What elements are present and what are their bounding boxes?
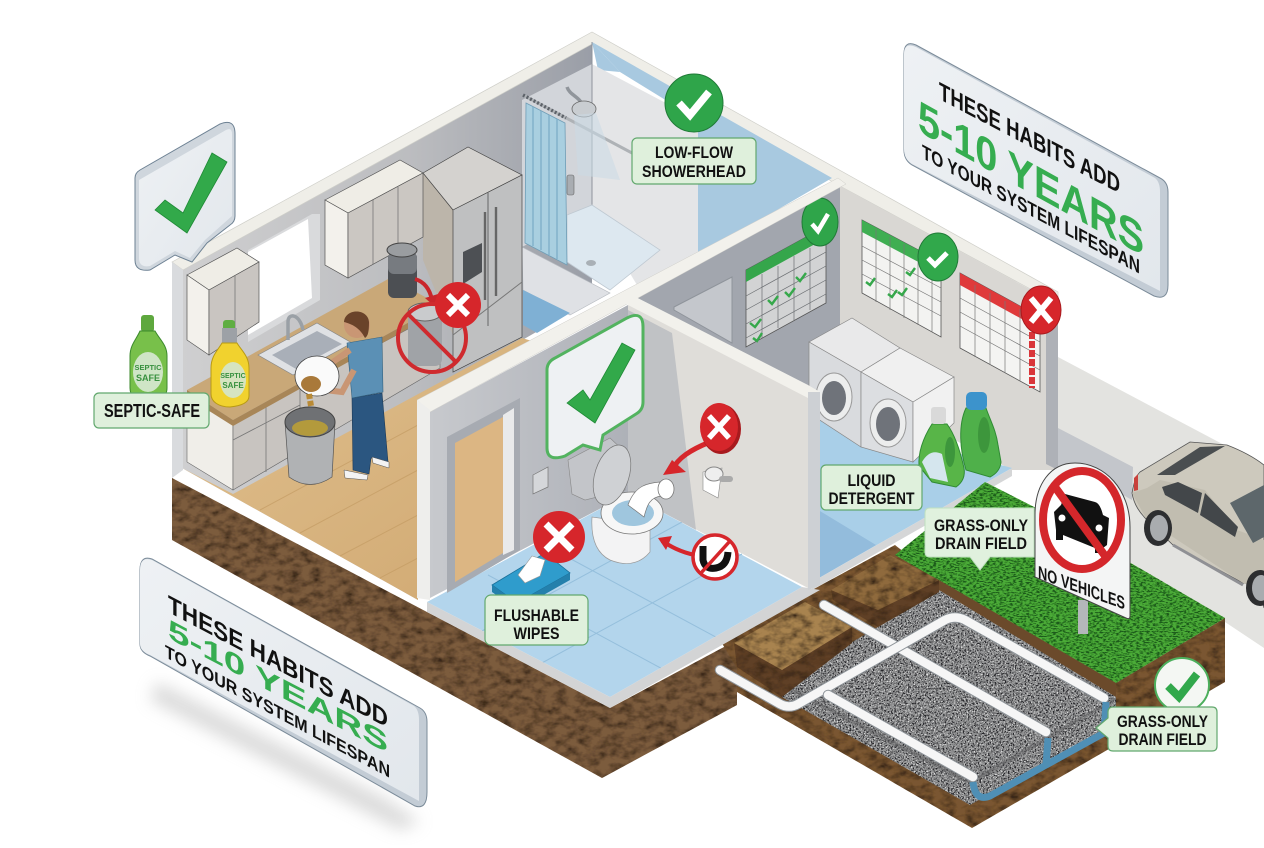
label: low-flow showerhead <box>632 138 756 184</box>
banner: lower left lifespan: THESE HABITS ADD <box>168 590 388 734</box>
washer and dryer <box>809 318 954 462</box>
fridge <box>423 147 522 372</box>
label: grass-only drain field (bottom) with check: GRASS-ONLY <box>1117 713 1208 731</box>
label: grass-only drain field (top): GRASS-ONLY <box>934 516 1029 535</box>
label: flushable wipes: FLUSHABLE <box>494 606 579 625</box>
banner: upper right lifespan: 5-10 YEARS <box>918 91 1144 267</box>
icon: liquid detergent bottles <box>919 392 1001 487</box>
laundry floor <box>810 413 1012 590</box>
bathroom partition wall front <box>417 178 846 600</box>
icon: wall toilet paper holder <box>703 467 733 498</box>
upper cabinet right <box>325 160 423 278</box>
check badge: low-flow showerhead <box>665 74 723 132</box>
person scraping plate <box>320 312 389 480</box>
callout: bathroom green check <box>547 315 643 458</box>
banner: lower left lifespan <box>140 558 427 807</box>
icon: low-flow showerhead <box>567 87 620 195</box>
kitchen back wall <box>172 32 1058 600</box>
soil block right <box>831 555 939 627</box>
toilet <box>568 438 663 564</box>
banner: lower left lifespan: TO YOUR SYSTEM LIFESPAN <box>165 642 390 783</box>
icon: crossed-out disposal <box>398 279 481 372</box>
underground distribution pipe <box>973 702 1106 797</box>
icon: plate of food scraps <box>295 356 339 418</box>
bottle: yellow dish soap <box>211 320 249 407</box>
shower room <box>522 42 832 290</box>
label: flushable wipes: WIPES <box>514 624 560 643</box>
bottle: green septic-safe dish soap <box>130 315 167 401</box>
no vehicles sign <box>1035 463 1130 634</box>
bathtub <box>522 205 660 333</box>
upper cabinet left <box>187 248 259 355</box>
calendar: red cross, back wall <box>960 273 1061 392</box>
window <box>248 214 320 342</box>
label: low-flow showerhead: LOW-FLOW <box>655 143 734 162</box>
icon: toilet paper in bowl <box>628 479 674 517</box>
bottle: green septic-safe dish soap: SAFE <box>136 373 160 383</box>
bathroom door <box>447 398 520 593</box>
bottle: green septic-safe dish soap: SEPTIC <box>134 363 162 372</box>
no vehicles sign: NO VEHICLES <box>1038 562 1125 614</box>
label: septic-safe <box>94 393 209 428</box>
wall switch <box>533 467 548 494</box>
sink <box>258 316 352 375</box>
bottle: yellow dish soap: SEPTIC <box>220 373 246 380</box>
label: liquid detergent: DETERGENT <box>828 489 915 508</box>
bathroom floor <box>427 494 820 708</box>
laundry back wall <box>808 186 1058 470</box>
house soil base <box>172 478 737 778</box>
label: grass-only drain field (top) <box>925 508 1034 570</box>
label: septic-safe: SEPTIC-SAFE <box>104 401 200 421</box>
shower curtain and rod <box>523 95 632 265</box>
label: grass-only drain field (top): DRAIN FIELD <box>935 534 1027 553</box>
arrow and cross: toilet paper <box>663 403 741 475</box>
bottle: yellow dish soap: SAFE <box>222 381 244 390</box>
label: liquid detergent <box>821 465 922 510</box>
banner: lower left lifespan: 5-10 YEARS <box>168 614 388 760</box>
lower cabinets <box>187 312 440 490</box>
soil block left <box>734 602 852 697</box>
banner shadow <box>150 682 420 830</box>
car <box>1132 442 1264 608</box>
label: flushable wipes <box>485 595 588 645</box>
grass drain field <box>895 482 1225 683</box>
calendar: green check, side wall <box>746 198 838 347</box>
label: grass-only drain field (bottom) with check <box>1096 658 1217 751</box>
banner: upper right lifespan: TO YOUR SYSTEM LIFESPAN <box>922 140 1140 279</box>
label: low-flow showerhead: SHOWERHEAD <box>642 162 746 181</box>
calendar: green check, back wall <box>862 220 958 337</box>
kitchen floor <box>182 338 545 600</box>
laundry side wall <box>630 186 840 415</box>
gravel bed <box>782 580 1116 805</box>
banner: upper right lifespan: THESE HABITS ADD <box>939 76 1120 199</box>
icon: flushable wipes pack with cross <box>492 511 585 610</box>
driveway <box>1058 357 1264 648</box>
icon: trash can <box>285 407 335 484</box>
drain field soil base <box>720 545 1225 828</box>
label: grass-only drain field (bottom) with check: DRAIN FIELD <box>1118 731 1207 749</box>
icon: food waste disposal <box>387 243 417 298</box>
arrow and icon: no grease down drain <box>658 535 737 579</box>
countertop <box>187 278 440 426</box>
callout: kitchen green check <box>135 122 235 270</box>
label: liquid detergent: LIQUID <box>848 471 896 490</box>
drain pipes <box>720 605 1104 777</box>
